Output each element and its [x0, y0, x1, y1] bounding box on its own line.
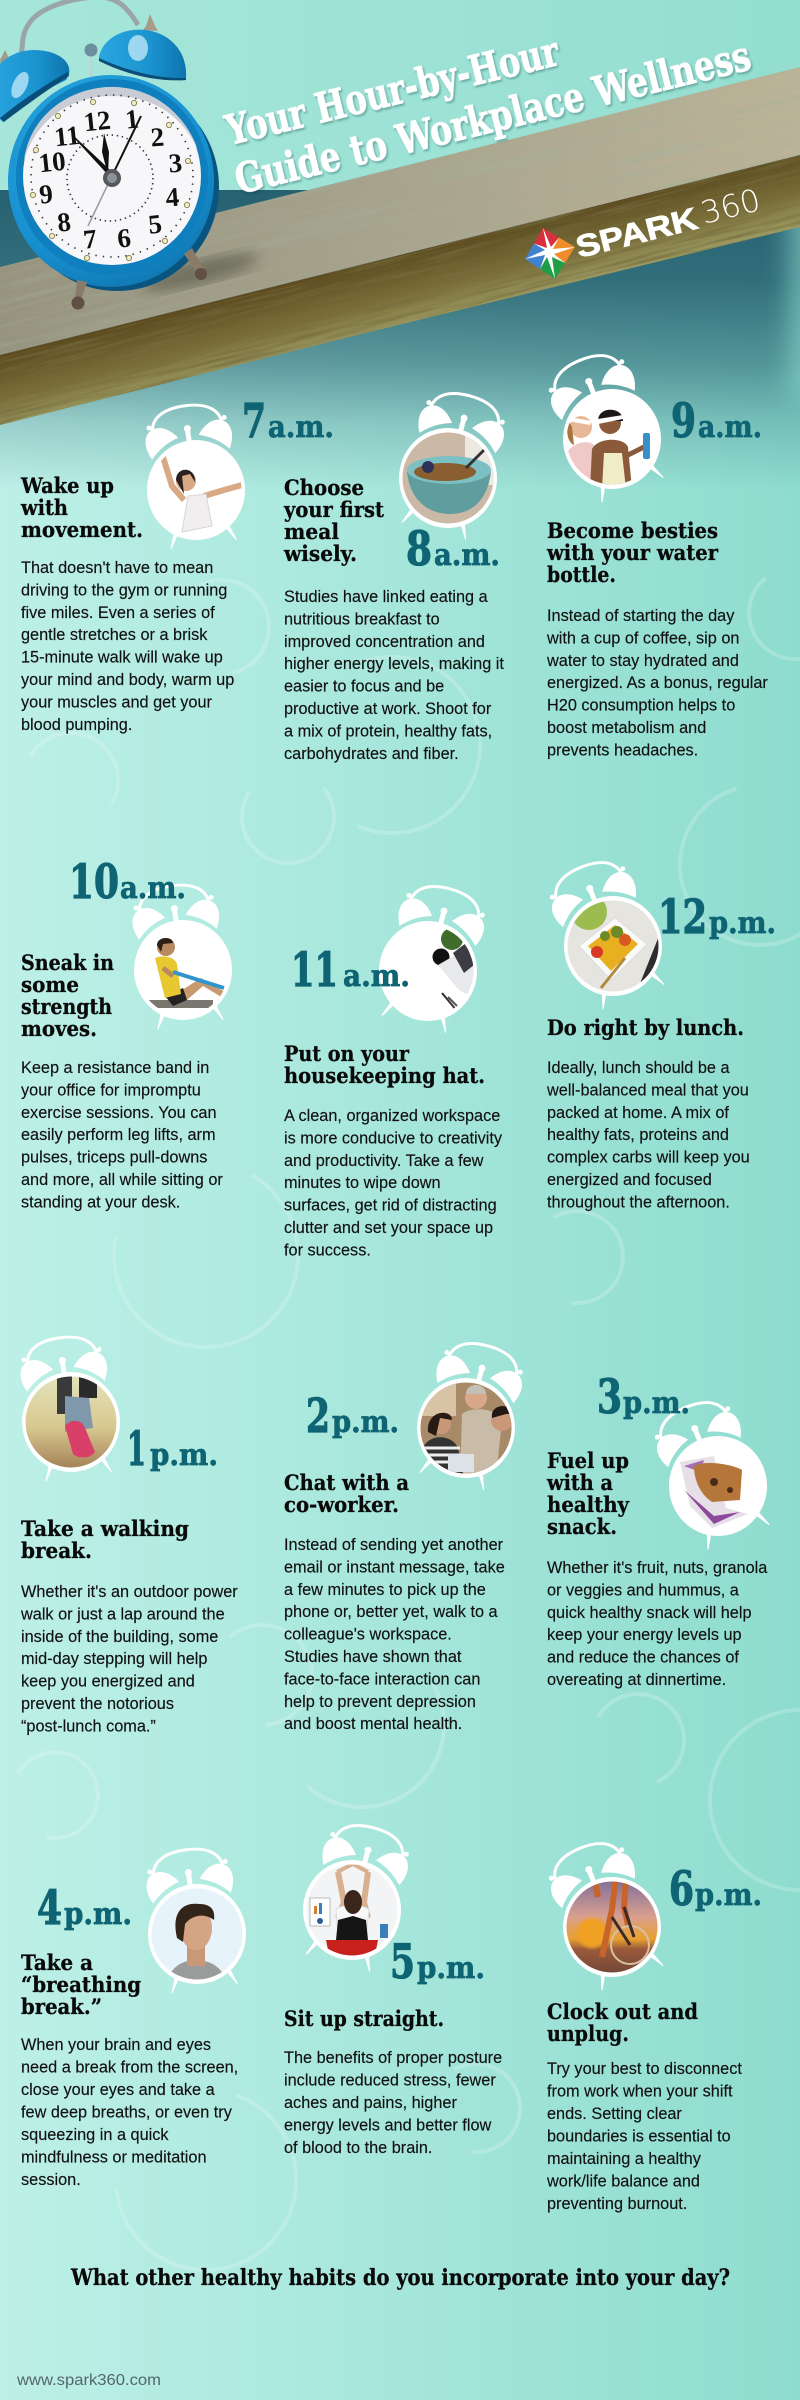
body text: Instead of sending yet another: [284, 1536, 504, 1554]
heading: some: [21, 972, 79, 997]
body text: from work when your shift: [547, 2082, 733, 2100]
heading: [284, 1470, 409, 1517]
time label: p.m.: [332, 1405, 399, 1440]
heading: wisely.: [283, 541, 357, 566]
body text: Whether it's fruit, nuts, granola: [547, 1559, 768, 1577]
dial numbers: 11: [53, 120, 81, 152]
heading: [547, 1999, 698, 2046]
dial ticks: [31, 95, 193, 257]
body text: When your brain and eyes: [21, 2036, 211, 2054]
dial numbers: 5: [147, 208, 163, 240]
hour markers: [30, 99, 191, 261]
time label: a.m.: [268, 410, 334, 445]
body text: packed at home. A mix of: [547, 1104, 729, 1122]
handle: [20, 0, 138, 58]
title: Your Hour-by-Hour: [220, 27, 565, 155]
body text: keep you energized and: [21, 1673, 195, 1691]
body text: Whether it's an outdoor power: [21, 1583, 238, 1601]
clock icon: walking shoe: [20, 1336, 120, 1482]
body text: mid-day stepping will help: [21, 1650, 207, 1668]
time label: [390, 1935, 485, 1990]
body text: gentle stretches or a brisk: [21, 626, 208, 644]
heading: with: [20, 495, 68, 520]
heading: Fuel up: [547, 1448, 629, 1473]
time label: a.m.: [120, 871, 186, 906]
body text: a mix of protein, healthy fats,: [284, 722, 492, 740]
heading: break.”: [21, 1994, 102, 2019]
heading: Sit up straight.: [284, 2006, 444, 2031]
body text: easily perform leg lifts, arm: [21, 1126, 216, 1144]
time label: [671, 394, 762, 449]
time label: p.m.: [709, 906, 776, 941]
body text: prevent the notorious: [21, 1695, 174, 1713]
heading: bottle.: [547, 562, 616, 587]
body text: phone or, better yet, walk to a: [284, 1603, 499, 1621]
header sky: [0, 0, 800, 270]
clock icon: two women with water bottle: [548, 354, 664, 502]
logo: Spark360: SPARK: [572, 201, 702, 265]
section: 12 p.m.: [534, 848, 776, 1211]
heading: [283, 475, 384, 566]
dial numbers: 10: [37, 146, 67, 178]
body text: Try your best to disconnect: [547, 2060, 742, 2078]
time label: [306, 1389, 399, 1444]
body text: clutter and set your space up: [284, 1219, 493, 1237]
body text: inside of the building, some: [21, 1628, 218, 1646]
time label: 7: [242, 394, 266, 449]
clock icon: woman stretching at desk: [303, 1824, 409, 1972]
body text: walk or just a lap around the: [20, 1605, 225, 1623]
body text: a few minutes to pick up the: [284, 1581, 486, 1599]
heading: Sneak in: [21, 950, 114, 975]
body text: is more conducive to creativity: [284, 1129, 503, 1147]
body text: energized and focused: [547, 1171, 712, 1189]
heading: Chat with a: [284, 1470, 409, 1495]
time label: 1: [127, 1422, 146, 1477]
heading: unplug.: [547, 2021, 629, 2046]
clock face: [23, 87, 201, 265]
heading: co-worker.: [284, 1492, 399, 1517]
dial numbers: 9: [38, 178, 54, 210]
dial numbers: 8: [56, 206, 72, 238]
body text: squeezing in a quick: [21, 2126, 169, 2144]
body text: mindfulness or meditation: [21, 2148, 207, 2166]
body text: session.: [21, 2171, 81, 2189]
body text: standing at your desk.: [21, 1193, 180, 1211]
dial numbers: [37, 103, 183, 255]
clock icon: tidy desk: [379, 885, 485, 1033]
body text: Instead of starting the day: [547, 607, 735, 625]
time label: [406, 522, 500, 577]
body text: keep your energy levels up: [547, 1626, 742, 1644]
time label: 8: [406, 522, 432, 577]
section: 9 a.m.: [533, 341, 768, 759]
clock icon: woman stretching: [146, 404, 245, 550]
logo: Spark360: [525, 182, 764, 279]
logo: Spark360: 360: [697, 182, 764, 232]
heading: strength: [21, 994, 112, 1019]
body text: and boost mental health.: [284, 1715, 462, 1733]
clock icon: cyclist at sunset: [548, 1842, 664, 1990]
clock icon: cereal bowl: [399, 392, 505, 540]
body text: Ideally, lunch should be a: [547, 1059, 730, 1077]
section: 3 p.m.: [546, 1370, 786, 1689]
body text: few deep breaths, or even try: [21, 2104, 233, 2122]
dial numbers: 3: [168, 148, 183, 178]
body text: boost metabolism and: [547, 719, 706, 737]
body text: exercise sessions. You can: [21, 1104, 216, 1122]
heading: Put on your: [284, 1041, 410, 1066]
body text: and productivity. Take a few: [284, 1152, 484, 1170]
heading: with your water: [546, 540, 719, 565]
heading: Take a walking: [21, 1516, 189, 1541]
time label: [597, 1370, 690, 1425]
time label: [658, 890, 776, 945]
right bell: [99, 30, 186, 80]
heading: [284, 1041, 485, 1088]
body text: your muscles and get your: [21, 693, 213, 711]
heading: Wake up: [20, 473, 114, 498]
body text: complex carbs will keep you: [547, 1149, 750, 1167]
body text: prevents headaches.: [547, 741, 698, 759]
time label: p.m.: [417, 1951, 485, 1986]
body text: 15-minute walk will wake up: [21, 649, 223, 667]
heading: [21, 950, 114, 1041]
time label: p.m.: [623, 1386, 690, 1421]
heading: Do right by lunch.: [547, 1015, 744, 1040]
heading: break.: [21, 1538, 92, 1563]
body text: need a break from the screen,: [21, 2058, 238, 2076]
time label: [37, 1881, 132, 1936]
body text: pulses, triceps pull-downs: [21, 1149, 207, 1167]
clock icon: snack bar: [654, 1401, 770, 1550]
clock icon: packed lunch: [550, 861, 664, 1010]
body text: higher energy levels, making it: [284, 655, 504, 673]
body text: energy levels and better flow: [284, 2116, 491, 2134]
body text: colleague's workspace.: [284, 1626, 452, 1644]
time label: 4: [37, 1881, 62, 1936]
body text: Studies have shown that: [284, 1648, 462, 1666]
body text: throughout the afternoon.: [547, 1193, 730, 1211]
body text: with a cup of coffee, sip on: [546, 629, 739, 647]
footer url: www.spark360.com: [16, 2372, 161, 2389]
body text: productive at work. Shoot for: [284, 700, 492, 718]
left bell: [0, 50, 69, 122]
body text: for success.: [284, 1241, 371, 1259]
clock body: [15, 83, 219, 291]
heading: Become besties: [547, 518, 718, 543]
time label: [242, 394, 334, 449]
body text: ends. Setting clear: [547, 2105, 682, 2123]
clock icon: man breathing: [146, 1848, 246, 1994]
section: 10 a.m.: [21, 855, 242, 1211]
clock icon: man with resistance band: [132, 884, 232, 1030]
section: 11 a.m.: [284, 876, 503, 1259]
clock hands: [75, 116, 141, 226]
time label: 3: [597, 1370, 622, 1425]
time label: a.m.: [343, 959, 410, 994]
body text: healthy fats, proteins and: [547, 1126, 729, 1144]
decorative clock-ring arcs: [0, 548, 800, 2295]
time label: [291, 943, 410, 998]
section: 7 a.m.: [20, 394, 334, 734]
time label: 6: [669, 1862, 694, 1917]
dial numbers: 6: [116, 222, 132, 254]
header: wooden shelf: [0, 67, 800, 425]
body text: and reduce the chances of: [547, 1649, 739, 1667]
time label: 5: [390, 1935, 415, 1990]
body text: close your eyes and take a: [21, 2081, 216, 2099]
time label: [127, 1422, 218, 1477]
body text: minutes to wipe down: [284, 1174, 441, 1192]
body text: work/life balance and: [546, 2172, 700, 2190]
body text: water to stay hydrated and: [546, 652, 739, 670]
body text: easier to focus and be: [284, 678, 444, 696]
bell knobs: [0, 14, 158, 72]
body text: your mind and body, warm up: [21, 671, 234, 689]
heading: snack.: [547, 1514, 617, 1539]
heading: [546, 1448, 630, 1539]
section: 8 a.m.: [283, 383, 520, 763]
body text: “post-lunch coma.”: [21, 1717, 156, 1735]
section: 6 p.m.: [533, 1829, 762, 2213]
dial numbers: 7: [82, 223, 98, 255]
body text: Keep a resistance band in: [21, 1059, 209, 1077]
body text: improved concentration and: [284, 633, 485, 651]
clock shadow: [139, 246, 261, 298]
heading: Take a: [21, 1950, 93, 1975]
shelf shadow: [0, 190, 800, 490]
body text: help to prevent depression: [284, 1693, 476, 1711]
body text: energized. As a bonus, regular: [547, 674, 768, 692]
time label: p.m.: [64, 1897, 132, 1932]
dial numbers: 2: [150, 122, 165, 152]
time label: 11: [291, 943, 338, 998]
body text: The benefits of proper posture: [284, 2049, 502, 2067]
heading: healthy: [547, 1492, 630, 1517]
time label: 12: [658, 890, 707, 945]
body text: boundaries is essential to: [547, 2128, 731, 2146]
body text: H20 consumption helps to: [547, 697, 735, 715]
heading: moves.: [21, 1016, 97, 1041]
body text: quick healthy snack will help: [547, 1604, 752, 1622]
heading: “breathing: [21, 1972, 141, 1997]
closing question: What other healthy habits do you incorporate into your day?: [70, 2265, 730, 2291]
body text: carbohydrates and fiber.: [284, 745, 459, 763]
time label: [669, 1862, 762, 1917]
time label: a.m.: [434, 538, 500, 573]
heading: your first: [283, 497, 384, 522]
clock icon: co-workers chatting: [417, 1342, 523, 1490]
body text: blood pumping.: [21, 716, 132, 734]
alarm clock: [0, 0, 261, 310]
heading: with a: [546, 1470, 613, 1495]
dial numbers: 1: [124, 103, 140, 135]
body text: or veggies and hummus, a: [547, 1581, 740, 1599]
time label: 10: [69, 855, 119, 910]
section: 1 p.m.: [8, 1331, 238, 1735]
heading: [20, 473, 143, 542]
time label: a.m.: [698, 410, 762, 445]
heading: [546, 518, 719, 587]
heading: movement.: [21, 517, 143, 542]
dial numbers: 12: [82, 105, 112, 137]
heading: [21, 1950, 141, 2019]
time label: 9: [671, 394, 696, 449]
body text: A clean, organized workspace: [284, 1107, 500, 1125]
heading: Clock out and: [547, 1999, 698, 2024]
section: 2 p.m.: [284, 1333, 538, 1733]
legs: [72, 248, 207, 310]
logo mark: [525, 228, 575, 279]
body text: aches and pains, higher: [284, 2094, 457, 2112]
time label: 2: [306, 1389, 330, 1444]
body text: five miles. Even a series of: [21, 604, 215, 622]
body text: and more, all while sitting or: [21, 1171, 223, 1189]
body text: of blood to the brain.: [284, 2139, 432, 2157]
dial numbers: 4: [165, 182, 180, 212]
section: 4 p.m.: [21, 1843, 256, 2189]
heading: Choose: [284, 475, 364, 500]
body text: overeating at dinnertime.: [547, 1671, 726, 1689]
section: 5 p.m.: [284, 1815, 502, 2157]
heading: [21, 1516, 189, 1563]
body text: surfaces, get rid of distracting: [284, 1197, 497, 1215]
heading: meal: [284, 519, 339, 544]
body text: well-balanced meal that you: [546, 1081, 749, 1099]
body text: include reduced stress, fewer: [284, 2072, 496, 2090]
body text: That doesn't have to mean: [21, 559, 213, 577]
body text: your office for impromptu: [21, 1081, 201, 1099]
body text: maintaining a healthy: [547, 2150, 702, 2168]
heading: housekeeping hat.: [284, 1063, 485, 1088]
bell pin: [84, 44, 98, 78]
body text: face-to-face interaction can: [284, 1670, 480, 1688]
body text: driving to the gym or running: [21, 581, 227, 599]
body text: Studies have linked eating a: [284, 588, 489, 606]
time label: [69, 855, 186, 910]
body text: nutritious breakfast to: [284, 610, 440, 628]
body text: preventing burnout.: [547, 2195, 687, 2213]
time label: p.m.: [695, 1878, 762, 1913]
body text: email or instant message, take: [284, 1558, 505, 1576]
time label: p.m.: [150, 1438, 218, 1473]
